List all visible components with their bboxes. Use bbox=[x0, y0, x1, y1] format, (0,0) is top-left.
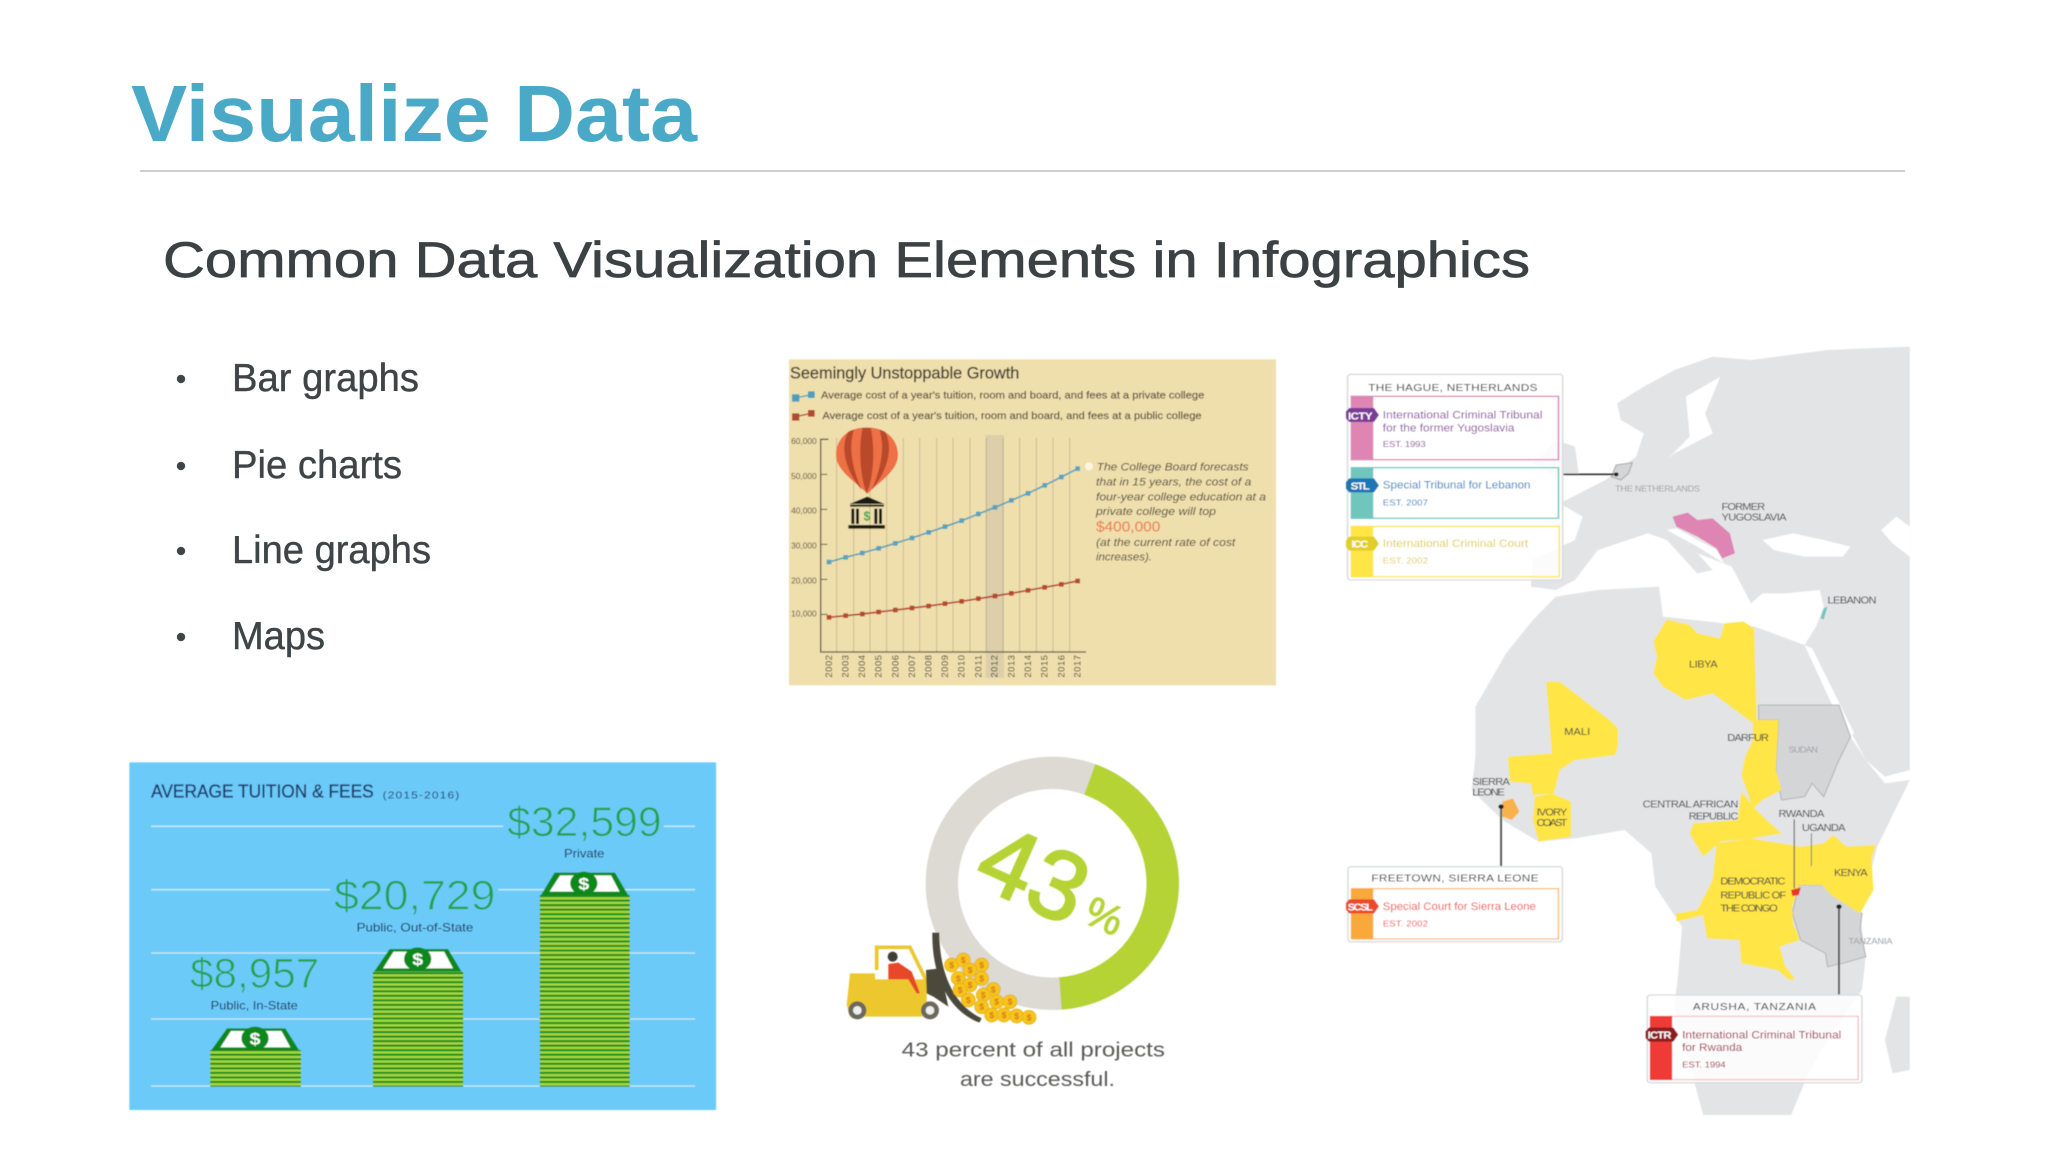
year labels: 2016 bbox=[1056, 655, 1066, 678]
map land bbox=[1472, 347, 1910, 1115]
donut value: % bbox=[1078, 887, 1131, 945]
map labels: FORMER bbox=[1722, 503, 1766, 513]
highlighted yellow countries bbox=[1508, 619, 1875, 980]
donut value: 43 bbox=[962, 802, 1105, 946]
ICC entry bbox=[1346, 526, 1559, 577]
forecast note: increases). bbox=[1096, 551, 1152, 563]
bar: public in-state bbox=[190, 950, 319, 1087]
chart legend bbox=[792, 391, 1205, 422]
map labels: REPUBLIC bbox=[1689, 812, 1739, 822]
year labels: 2005 bbox=[874, 655, 884, 678]
donut caption: 43 percent of all projects bbox=[902, 1040, 1165, 1062]
highlighted other countries bbox=[1502, 463, 1828, 896]
STL entry: STL bbox=[1351, 481, 1370, 492]
callout: Arusha bbox=[1646, 995, 1862, 1083]
ICTY entry bbox=[1346, 396, 1558, 460]
callout: Freetown: EST. 2002 bbox=[1383, 919, 1428, 929]
panel: map bbox=[1346, 347, 1910, 1115]
forecast note: private college will top bbox=[1095, 506, 1216, 518]
year labels: 2010 bbox=[957, 655, 967, 678]
icon: gold coins: $ bbox=[979, 960, 984, 970]
Tanzania region bbox=[1792, 885, 1866, 967]
year labels: 2017 bbox=[1073, 655, 1083, 678]
blue series line bbox=[827, 466, 1080, 564]
icon: gold coins: $ bbox=[1027, 1012, 1032, 1022]
callout: The Hague: THE HAGUE, NETHERLANDS bbox=[1368, 383, 1537, 394]
bullet list: Maps bbox=[232, 615, 325, 658]
ICC entry: ICC bbox=[1351, 539, 1369, 550]
axis labels: 50,000 bbox=[791, 471, 817, 481]
bullet list: Pie charts bbox=[232, 444, 402, 487]
year labels: 2004 bbox=[857, 655, 867, 678]
icon: gold coins: $ bbox=[956, 973, 961, 983]
bar: private: $ bbox=[578, 875, 589, 893]
subtitle: Common Data Visualization Elements in Infographics bbox=[163, 232, 1530, 288]
icon: gold coins: $ bbox=[968, 980, 973, 990]
axis labels bbox=[791, 436, 817, 619]
ICC entry: International Criminal Court bbox=[1383, 537, 1529, 550]
icon: gold coins: $ bbox=[979, 973, 984, 983]
STL entry: Special Tribunal for Lebanon bbox=[1383, 478, 1531, 491]
year labels bbox=[824, 655, 1083, 678]
ICTY entry: for the former Yugoslavia bbox=[1383, 421, 1515, 434]
bar: public out-of-state: $ bbox=[412, 950, 423, 969]
callout: Freetown: FREETOWN, SIERRA LEONE bbox=[1371, 873, 1539, 884]
bar: private: $32,599 bbox=[507, 798, 662, 845]
ICC entry: EST. 2002 bbox=[1383, 556, 1428, 566]
red series line bbox=[827, 579, 1080, 620]
donut caption bbox=[902, 1040, 1165, 1091]
muted map labels: SUDAN bbox=[1788, 745, 1818, 755]
map labels: RWANDA bbox=[1779, 810, 1825, 820]
map labels: MALI bbox=[1564, 728, 1590, 738]
panel: tuition bar graph bbox=[129, 762, 716, 1110]
forecast note: four-year college education at a bbox=[1096, 491, 1266, 503]
connector lines bbox=[1498, 472, 1842, 995]
bar: private bbox=[507, 798, 662, 1087]
year labels: 2014 bbox=[1023, 655, 1033, 678]
icon: gold coins: $ bbox=[961, 955, 966, 965]
forecast note bbox=[1095, 462, 1266, 563]
map labels bbox=[1472, 503, 1876, 914]
icon: gold coins: $ bbox=[958, 985, 963, 995]
muted map labels bbox=[1615, 484, 1893, 946]
icon: gold coins: $ bbox=[994, 997, 999, 1007]
map labels: KENYA bbox=[1834, 869, 1868, 879]
forecast note: $400,000 bbox=[1096, 520, 1160, 536]
title: Visualize Data bbox=[131, 69, 698, 158]
map labels: LIBYA bbox=[1689, 660, 1718, 670]
axis labels: 60,000 bbox=[791, 436, 817, 446]
callout: Freetown: Special Court for Sierra Leone bbox=[1383, 900, 1536, 913]
map labels: DARFUR bbox=[1727, 734, 1769, 744]
forecast note: that in 15 years, the cost of a bbox=[1096, 476, 1251, 488]
axis labels: 30,000 bbox=[791, 540, 817, 550]
map labels: YUGOSLAVIA bbox=[1722, 513, 1787, 523]
icon: gold coins: $ bbox=[966, 995, 971, 1005]
bar: private: Private bbox=[564, 846, 604, 860]
Sudan region bbox=[1759, 705, 1850, 800]
bar: public out-of-state: Public, Out-of-State bbox=[357, 921, 473, 934]
bar: public in-state: Public, In-State bbox=[211, 998, 298, 1012]
STL entry bbox=[1346, 467, 1558, 519]
ICTY entry: International Criminal Tribunal bbox=[1383, 408, 1542, 421]
year labels: 2015 bbox=[1040, 655, 1050, 678]
forecast note: (at the current rate of cost bbox=[1096, 537, 1236, 549]
map labels: SIERRA bbox=[1472, 778, 1510, 788]
donut caption: are successful. bbox=[960, 1069, 1115, 1091]
icon: hot air balloon bbox=[836, 427, 898, 494]
icon: gold coins: $ bbox=[1008, 997, 1013, 1007]
icon: bank bbox=[848, 497, 885, 529]
year labels: 2007 bbox=[907, 655, 917, 678]
year labels: 2012 bbox=[990, 655, 1000, 678]
muted map labels: TANZANIA bbox=[1849, 937, 1893, 946]
ICTY entry: EST. 1993 bbox=[1383, 440, 1426, 449]
callout: Arusha: for Rwanda bbox=[1682, 1041, 1742, 1054]
bullet list: Line graphs bbox=[232, 529, 431, 572]
year labels: 2003 bbox=[841, 655, 851, 678]
map labels: CENTRAL AFRICAN bbox=[1643, 800, 1738, 810]
chart heading: Seemingly Unstoppable Growth bbox=[790, 363, 1019, 382]
callout: Arusha: International Criminal Tribunal bbox=[1682, 1028, 1841, 1041]
bullet list: Bar graphs bbox=[232, 357, 419, 400]
year labels: 2008 bbox=[924, 655, 934, 678]
map labels: IVORY bbox=[1537, 808, 1567, 818]
bar graph heading: (2015-2016) bbox=[383, 790, 460, 801]
map labels: LEBANON bbox=[1828, 596, 1876, 606]
axis labels: 10,000 bbox=[791, 609, 817, 619]
chart legend: Average cost of a year's tuition, room and board, and fees at a public college bbox=[822, 411, 1202, 422]
bar: public out-of-state bbox=[334, 872, 495, 1087]
icon: gold coins: $ bbox=[979, 1002, 984, 1012]
icon: gold coins: $ bbox=[991, 984, 996, 994]
icon: gold coins bbox=[945, 953, 1036, 1024]
callout: Freetown: SCSL bbox=[1348, 903, 1374, 913]
year labels: 2006 bbox=[890, 655, 900, 678]
year labels: 2002 bbox=[824, 655, 834, 678]
inland seas bbox=[1651, 377, 1910, 737]
icon: gold coins: $ bbox=[949, 960, 954, 970]
map labels: THE CONGO bbox=[1720, 904, 1778, 914]
bar: public in-state: $8,957 bbox=[190, 950, 319, 997]
axis labels: 40,000 bbox=[791, 506, 817, 516]
STL entry: EST. 2007 bbox=[1383, 498, 1428, 507]
muted map labels: THE NETHERLANDS bbox=[1615, 484, 1700, 494]
icon: gold coins: $ bbox=[981, 990, 986, 1000]
year labels: 2009 bbox=[940, 655, 950, 678]
bar graph heading: AVERAGE TUITION & FEES bbox=[151, 782, 374, 802]
bar: public out-of-state: $20,729 bbox=[334, 872, 495, 919]
year labels: 2013 bbox=[1006, 655, 1016, 678]
bar: public in-state: $ bbox=[250, 1030, 260, 1048]
donut ring bbox=[942, 764, 1179, 1010]
callout: Arusha: ICTR bbox=[1648, 1031, 1672, 1041]
callout: Freetown bbox=[1346, 867, 1562, 942]
map labels: COAST bbox=[1537, 819, 1568, 829]
icon: gold coins: $ bbox=[1014, 1011, 1019, 1021]
year labels: 2011 bbox=[973, 655, 983, 678]
panel: donut chart bbox=[847, 764, 1179, 1091]
callout: The Hague bbox=[1346, 374, 1563, 580]
icon: gold coins: $ bbox=[989, 1010, 994, 1020]
map labels: UGANDA bbox=[1802, 824, 1846, 834]
map labels: REPUBLIC OF bbox=[1720, 891, 1786, 901]
forecast note: The College Board forecasts bbox=[1097, 462, 1249, 474]
panel: line chart bbox=[789, 359, 1276, 685]
callout: Arusha: EST. 1994 bbox=[1682, 1060, 1726, 1070]
map labels: DEMOCRATIC bbox=[1720, 877, 1786, 887]
ICTY entry: ICTY bbox=[1348, 411, 1372, 422]
axis labels: 20,000 bbox=[791, 575, 817, 585]
icon: bank: $ bbox=[863, 510, 871, 524]
icon: gold coins: $ bbox=[968, 965, 973, 975]
icon: gold coins: $ bbox=[1002, 1010, 1007, 1020]
icon: forklift bbox=[847, 933, 982, 1023]
bullet list bbox=[177, 357, 431, 658]
chart legend: Average cost of a year's tuition, room and board, and fees at a private college bbox=[821, 391, 1205, 402]
map labels: LEONE bbox=[1472, 788, 1505, 798]
callout: Arusha: ARUSHA, TANZANIA bbox=[1693, 1002, 1817, 1013]
